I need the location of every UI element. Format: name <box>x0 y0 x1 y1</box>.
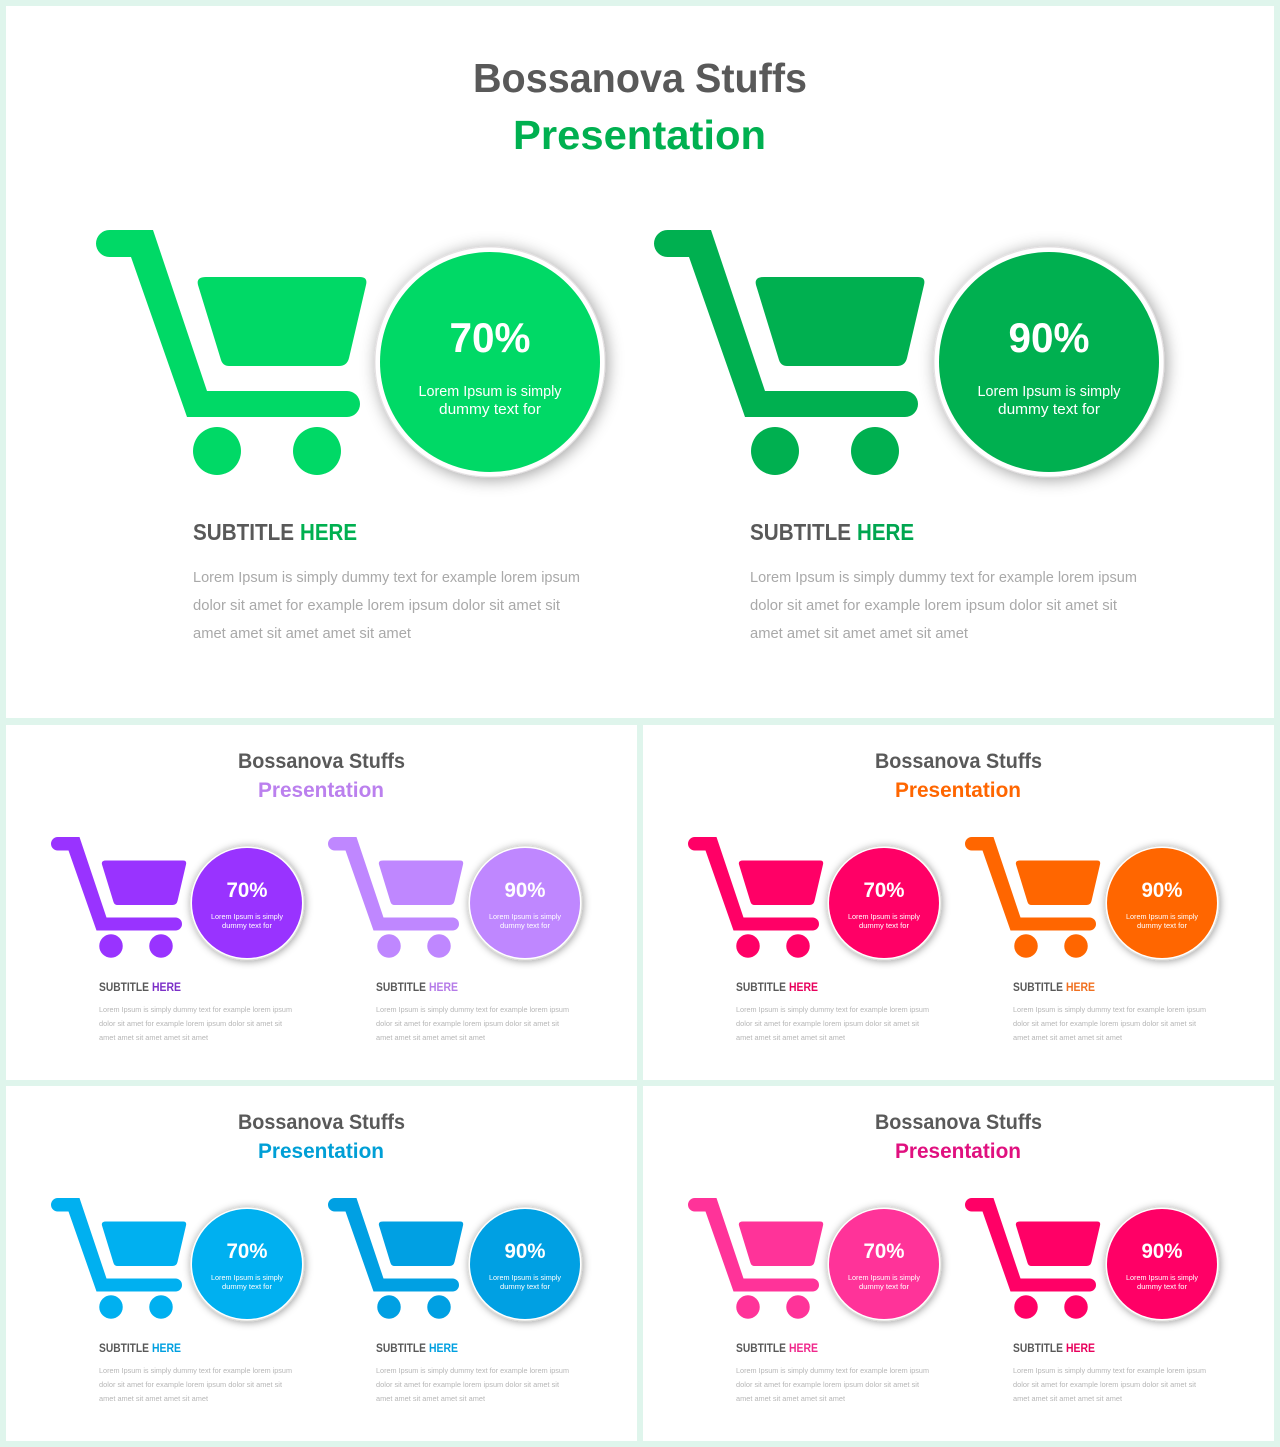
callout: 90% circle: 90% <box>1008 314 1090 361</box>
title: Bossanova Stuffs <box>238 750 405 773</box>
subtitle: HERE <box>152 1343 181 1355</box>
text block <box>193 570 580 642</box>
callout: 70%: 70% <box>226 1240 268 1263</box>
text block: amet amet sit amet amet sit amet <box>750 626 968 642</box>
callout: 90%: Lorem Ipsum is simply <box>1126 912 1198 921</box>
subtitle: SUBTITLE <box>376 1343 426 1355</box>
callout: 90% <box>1105 846 1219 960</box>
icon: cart <box>51 1198 186 1319</box>
text block: dolor sit amet for example lorem ipsum dolor sit amet sit <box>1013 1019 1197 1028</box>
icon: cart <box>688 837 823 958</box>
callout: 90% <box>1105 1207 1219 1321</box>
text block <box>1013 1366 1206 1403</box>
callout: 90%: 90% <box>504 1240 546 1263</box>
subtitle: HERE <box>300 519 357 545</box>
heading: Presentation <box>258 779 384 802</box>
text block: dolor sit amet for example lorem ipsum dolor sit amet sit <box>736 1380 920 1389</box>
callout: 70%: dummy text for <box>859 1282 909 1291</box>
callout: 70%: 70% <box>864 879 905 902</box>
panel: magenta slide <box>643 1086 1274 1441</box>
callout: 70%: Lorem Ipsum is simply <box>211 912 283 921</box>
callout: 70%: 70% <box>226 879 268 902</box>
callout: 90% circle <box>934 247 1164 477</box>
title: Bossanova Stuffs <box>238 1111 405 1134</box>
text block: amet amet sit amet amet sit amet <box>376 1394 486 1403</box>
callout: 90%: dummy text for <box>1137 921 1187 930</box>
title: Bossanova Stuffs: Bossanova Stuffs <box>473 55 807 101</box>
heading: Presentation <box>258 1140 384 1163</box>
callout: 90%: dummy text for <box>1137 1282 1187 1291</box>
text block: dolor sit amet for example lorem ipsum dolor sit amet sit <box>750 598 1117 614</box>
subtitle <box>376 982 458 994</box>
subtitle <box>376 1343 458 1355</box>
subtitle <box>1013 982 1095 994</box>
text block <box>376 1005 569 1042</box>
callout: 70% circle: 70% <box>450 314 530 361</box>
callout: 90%: dummy text for <box>500 1282 550 1291</box>
callout: 70% circle <box>375 247 605 477</box>
callout: 70% <box>827 1207 941 1321</box>
panel: pink and orange slide <box>643 725 1274 1080</box>
icon: cart <box>51 837 186 958</box>
callout: 70%: dummy text for <box>222 921 272 930</box>
subtitle: SUBTITLE <box>736 982 786 994</box>
callout: 70%: dummy text for <box>859 921 909 930</box>
callout: 70%: dummy text for <box>222 1282 272 1291</box>
text block <box>376 1366 569 1403</box>
subtitle: SUBTITLE <box>1013 1343 1063 1355</box>
text block: Lorem Ipsum is simply dummy text for example lorem ipsum <box>736 1005 929 1014</box>
text block: Lorem Ipsum is simply dummy text for example lorem ipsum <box>99 1005 292 1014</box>
text block: amet amet sit amet amet sit amet <box>1013 1394 1123 1403</box>
text block: Lorem Ipsum is simply dummy text for example lorem ipsum <box>1013 1366 1206 1375</box>
subtitle <box>99 1343 181 1355</box>
callout: 70%: Lorem Ipsum is simply <box>848 912 920 921</box>
title: Bossanova Stuffs <box>875 750 1042 773</box>
callout: 70% circle: dummy text for <box>439 402 541 418</box>
icon: shopping cart 90% <box>654 230 924 475</box>
callout: 70% <box>190 846 304 960</box>
callout: 70% <box>827 846 941 960</box>
subtitle <box>736 982 818 994</box>
text block: dolor sit amet for example lorem ipsum dolor sit amet sit <box>376 1019 560 1028</box>
text block: Lorem Ipsum is simply dummy text for example lorem ipsum <box>750 570 1137 586</box>
callout: 90%: Lorem Ipsum is simply <box>489 1273 561 1282</box>
callout: 90%: 90% <box>1142 1240 1183 1263</box>
icon: cart <box>328 1198 463 1319</box>
text block: Lorem Ipsum is simply dummy text for example lorem ipsum <box>193 570 580 586</box>
callout: 90%: dummy text for <box>500 921 550 930</box>
callout: 90%: Lorem Ipsum is simply <box>489 912 561 921</box>
text block <box>1013 1005 1206 1042</box>
callout: 90% circle: dummy text for <box>998 402 1100 418</box>
callout: 70% circle: Lorem Ipsum is simply <box>418 384 562 400</box>
callout: 70%: 70% <box>864 1240 905 1263</box>
text block: amet amet sit amet amet sit amet <box>736 1033 846 1042</box>
text block: amet amet sit amet amet sit amet <box>1013 1033 1123 1042</box>
panel: purple slide <box>6 725 637 1080</box>
subtitle: SUBTITLE <box>750 519 851 545</box>
subtitle: SUBTITLE <box>99 1343 149 1355</box>
callout: 90%: 90% <box>504 879 546 902</box>
subtitle: HERE <box>429 1343 458 1355</box>
text block: dolor sit amet for example lorem ipsum dolor sit amet sit <box>736 1019 920 1028</box>
heading: Presentation <box>895 1140 1021 1163</box>
callout: 90%: 90% <box>1142 879 1183 902</box>
text block: amet amet sit amet amet sit amet <box>99 1394 209 1403</box>
text block <box>99 1366 292 1403</box>
text block: dolor sit amet for example lorem ipsum dolor sit amet sit <box>99 1019 283 1028</box>
text block <box>736 1005 929 1042</box>
callout: 70%: Lorem Ipsum is simply <box>848 1273 920 1282</box>
subtitle: HERE <box>789 982 818 994</box>
text block: Lorem Ipsum is simply dummy text for example lorem ipsum <box>736 1366 929 1375</box>
text block: Lorem Ipsum is simply dummy text for example lorem ipsum <box>376 1005 569 1014</box>
subtitle: HERE <box>857 519 914 545</box>
heading: Presentation: Presentation <box>513 112 766 158</box>
text block: amet amet sit amet amet sit amet <box>193 626 411 642</box>
text block <box>99 1005 292 1042</box>
icon: cart <box>965 837 1100 958</box>
text block: amet amet sit amet amet sit amet <box>99 1033 209 1042</box>
text block: dolor sit amet for example lorem ipsum dolor sit amet sit <box>1013 1380 1197 1389</box>
callout: 90%: Lorem Ipsum is simply <box>1126 1273 1198 1282</box>
callout: 90% <box>468 846 582 960</box>
text block: Lorem Ipsum is simply dummy text for example lorem ipsum <box>1013 1005 1206 1014</box>
callout: 90% <box>468 1207 582 1321</box>
panel: large green slide <box>6 6 1274 718</box>
subtitle: SUBTITLE <box>736 1343 786 1355</box>
text block: dolor sit amet for example lorem ipsum dolor sit amet sit <box>193 598 560 614</box>
subtitle <box>736 1343 818 1355</box>
title: Bossanova Stuffs <box>875 1111 1042 1134</box>
text block: dolor sit amet for example lorem ipsum dolor sit amet sit <box>376 1380 560 1389</box>
subtitle <box>99 982 181 994</box>
subtitle: HERE <box>1066 1343 1095 1355</box>
subtitle: HERE <box>152 982 181 994</box>
icon: cart <box>328 837 463 958</box>
subtitle: SUBTITLE <box>99 982 149 994</box>
text block: Lorem Ipsum is simply dummy text for example lorem ipsum <box>376 1366 569 1375</box>
subtitle <box>750 519 914 545</box>
callout: 90% circle: Lorem Ipsum is simply <box>978 384 1121 400</box>
text block: amet amet sit amet amet sit amet <box>736 1394 846 1403</box>
icon: shopping cart 70% <box>96 230 366 475</box>
callout: 70% <box>190 1207 304 1321</box>
icon: cart <box>965 1198 1100 1319</box>
text block <box>750 570 1137 642</box>
subtitle <box>193 519 357 545</box>
panel: blue slide <box>6 1086 637 1441</box>
subtitle: HERE <box>429 982 458 994</box>
callout: 70%: Lorem Ipsum is simply <box>211 1273 283 1282</box>
subtitle: HERE <box>1066 982 1095 994</box>
subtitle: SUBTITLE <box>376 982 426 994</box>
icon: cart <box>688 1198 823 1319</box>
text block: Lorem Ipsum is simply dummy text for example lorem ipsum <box>99 1366 292 1375</box>
subtitle: SUBTITLE <box>193 519 294 545</box>
text block: amet amet sit amet amet sit amet <box>376 1033 486 1042</box>
subtitle: SUBTITLE <box>1013 982 1063 994</box>
text block <box>736 1366 929 1403</box>
subtitle: HERE <box>789 1343 818 1355</box>
heading: Presentation <box>895 779 1021 802</box>
text block: dolor sit amet for example lorem ipsum dolor sit amet sit <box>99 1380 283 1389</box>
subtitle <box>1013 1343 1095 1355</box>
